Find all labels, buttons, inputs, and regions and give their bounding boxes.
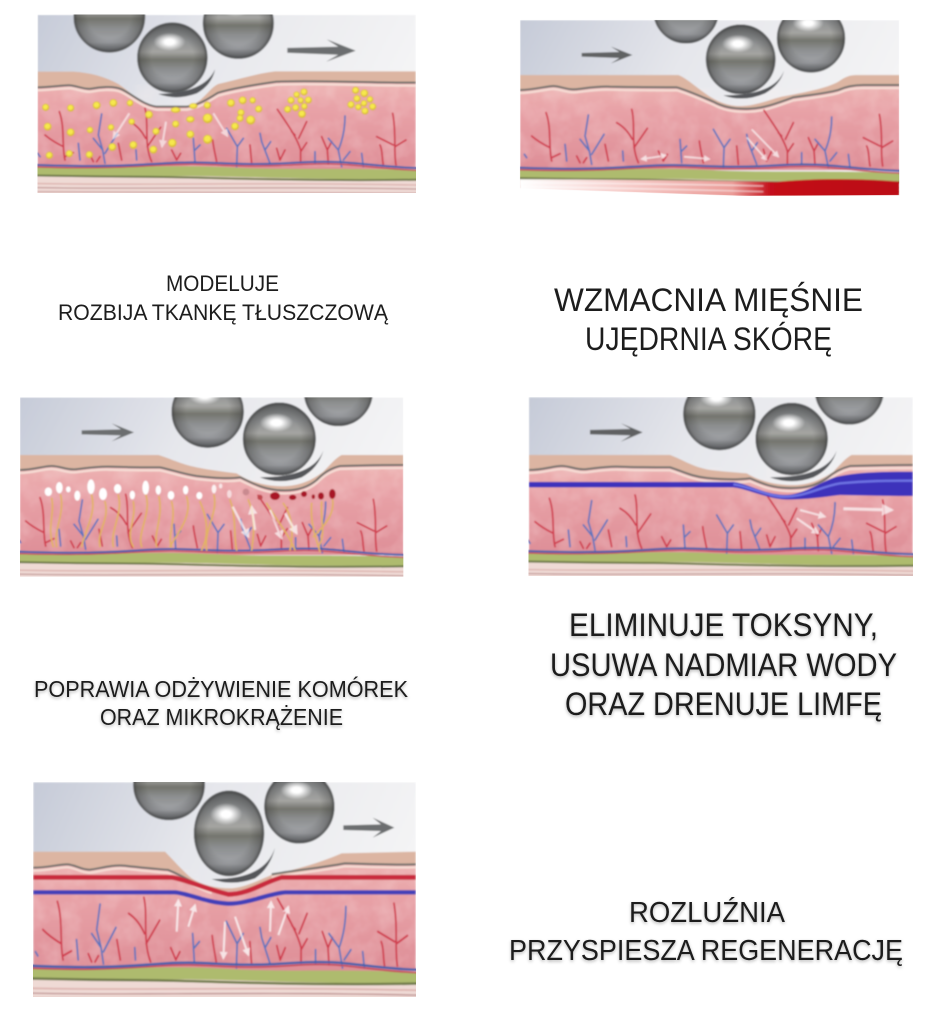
blood vessels <box>528 495 896 553</box>
red nutrient droplets <box>243 489 336 500</box>
dermis <box>529 465 913 555</box>
direction arrow <box>582 47 632 63</box>
caption: nutrition: ORAZ MIKROKRĄŻENIE <box>100 704 343 730</box>
epidermis <box>529 455 913 488</box>
epidermis <box>20 455 403 490</box>
caption: muscle strengthening <box>554 282 863 357</box>
lower tissue layers <box>25 962 458 1020</box>
sky background <box>529 397 913 576</box>
white flow arrows <box>797 509 892 533</box>
direction arrow <box>82 423 134 441</box>
caption: relaxation <box>509 896 903 967</box>
caption: nutrition <box>34 676 409 730</box>
caption: modeling: MODELUJE <box>166 271 279 296</box>
blood vessels <box>38 108 406 167</box>
caption: relaxation: ROZLUŹNIA <box>629 896 786 929</box>
lower tissue layers <box>520 548 931 595</box>
dermis <box>38 81 416 170</box>
vein band <box>33 892 416 904</box>
epidermis <box>520 75 899 109</box>
white flow arrows <box>113 113 227 147</box>
lower tissue layers <box>520 162 900 196</box>
rotation swoosh <box>260 451 323 481</box>
dermis <box>520 85 899 170</box>
pale layer under skin line <box>20 468 403 493</box>
direction arrow <box>590 423 643 442</box>
massage balls <box>683 356 884 475</box>
rotation swoosh <box>158 69 215 97</box>
massage balls <box>74 0 274 93</box>
direction arrow <box>287 39 356 62</box>
caption: modeling <box>58 271 388 325</box>
dermis <box>33 863 416 972</box>
caption: toxin elimination <box>550 607 897 722</box>
lower tissue layers <box>20 546 404 577</box>
muscle stripes <box>520 183 763 192</box>
epidermis <box>38 71 416 107</box>
rotation swoosh <box>723 71 784 99</box>
contracting muscle <box>520 179 899 197</box>
caption: toxin elimination: ELIMINUJE TOKSYNY, <box>569 607 878 643</box>
skin line <box>33 863 416 890</box>
white nutrient droplets <box>45 479 232 501</box>
yellow capillaries <box>51 495 333 552</box>
skin line <box>38 81 416 107</box>
dermis <box>20 465 403 555</box>
artery band <box>33 877 416 894</box>
caption: nutrition: POPRAWIA ODŻYWIENIE KOMÓREK <box>34 676 409 702</box>
skin line <box>20 465 403 490</box>
skin line <box>529 465 913 488</box>
massage balls <box>653 0 845 94</box>
caption: modeling: ROZBIJA TKANKĘ TŁUSZCZOWĄ <box>58 300 388 325</box>
caption: relaxation: PRZYSPIESZA REGENERACJĘ <box>509 935 903 967</box>
sky background <box>20 398 403 557</box>
pale layer under skin line <box>520 88 899 112</box>
panel: muscle strengthening illustration <box>520 20 900 196</box>
direction arrow <box>343 818 394 838</box>
caption: muscle strengthening: UJĘDRNIA SKÓRĘ <box>585 321 832 357</box>
lower tissue layers <box>38 160 416 193</box>
panel: relaxation illustration <box>25 750 458 1020</box>
pale layer under skin line <box>529 468 913 491</box>
caption: muscle strengthening: WZMACNIA MIĘŚNIE <box>554 282 863 318</box>
pale layer under skin line <box>33 866 416 893</box>
white flow arrows <box>233 507 297 538</box>
lymph vessel <box>529 472 913 499</box>
sky background <box>38 14 416 106</box>
massage balls <box>172 357 373 475</box>
panel: nutrition and microcirculation illustration <box>20 397 404 577</box>
lymph vessel highlight <box>733 481 913 497</box>
white flow arrows <box>177 900 288 958</box>
panel: fat breakdown illustration <box>38 14 416 193</box>
massage balls <box>133 750 334 876</box>
caption: toxin elimination: ORAZ DRENUJE LIMFĘ <box>565 686 882 722</box>
fat cells <box>42 87 376 159</box>
blood vessels <box>18 494 387 553</box>
rotation swoosh <box>212 848 275 883</box>
epidermis <box>33 852 416 891</box>
blood vessels <box>524 109 893 168</box>
skin line <box>520 85 899 109</box>
sky background <box>33 782 416 997</box>
rotation swoosh <box>770 451 837 481</box>
pale layer under skin line <box>38 84 416 110</box>
sky background <box>520 20 899 172</box>
white flow arrows <box>641 129 778 160</box>
panel: lymph drainage illustration <box>520 356 931 595</box>
blood vessels <box>35 897 407 968</box>
caption: toxin elimination: USUWA NADMIAR WODY <box>550 647 897 683</box>
